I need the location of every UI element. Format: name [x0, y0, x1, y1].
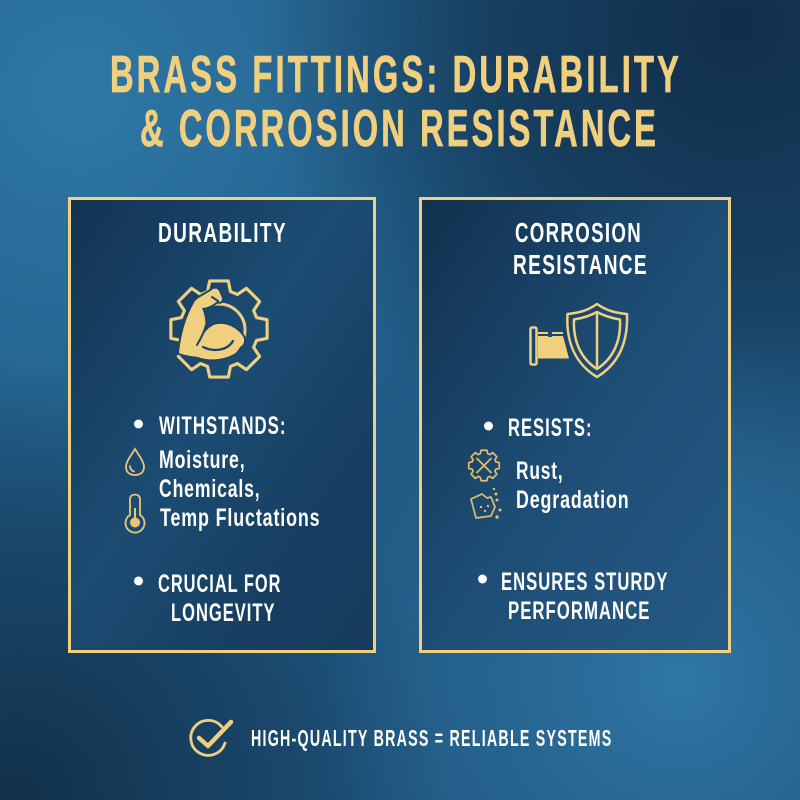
list: resists items: Degradation: [516, 486, 630, 514]
bullet: withstands: [134, 412, 286, 440]
bullet: resists: RESISTS:: [508, 414, 592, 442]
bullet: resists: [484, 414, 592, 442]
bullet: ensures sturdy performance: [478, 568, 668, 625]
icon: crumbling block: [471, 488, 502, 519]
list: withstands items: Temp Fluctations: [160, 504, 320, 532]
list: resists items: [516, 457, 630, 514]
panel: corrosion resistance: [420, 198, 730, 652]
icon: check mark: [191, 720, 231, 755]
icon: rust gear: [469, 450, 499, 481]
heading: corrosion resistance: RESISTANCE: [513, 249, 648, 280]
list: withstands items: Moisture,: [159, 446, 246, 474]
list: withstands items: Chemicals,: [159, 475, 260, 503]
bullet: crucial for longevity: CRUCIAL FOR: [158, 570, 282, 598]
title: [110, 46, 682, 158]
heading: corrosion resistance: [513, 217, 648, 280]
list: withstands items: [159, 446, 320, 532]
heading: durability: DURABILITY: [158, 217, 287, 248]
list: resists items: Rust,: [516, 457, 564, 485]
bullet: ensures sturdy performance: ENSURES STURDY: [501, 568, 668, 596]
bullet: crucial for longevity: [134, 570, 282, 627]
icon: water drop: [126, 449, 144, 475]
panel: durability: [70, 198, 374, 652]
heading: corrosion resistance: CORROSION: [515, 217, 642, 248]
bullet: ensures sturdy performance: PERFORMANCE: [508, 597, 650, 625]
callout: summary: [191, 720, 612, 755]
icon: thermometer: [126, 494, 144, 533]
bullet: crucial for longevity: LONGEVITY: [171, 599, 276, 627]
icon: pipe and shield: [530, 304, 627, 377]
icon: flexed arm in gear: [171, 281, 267, 377]
bullet: withstands: WITHSTANDS:: [159, 412, 286, 440]
